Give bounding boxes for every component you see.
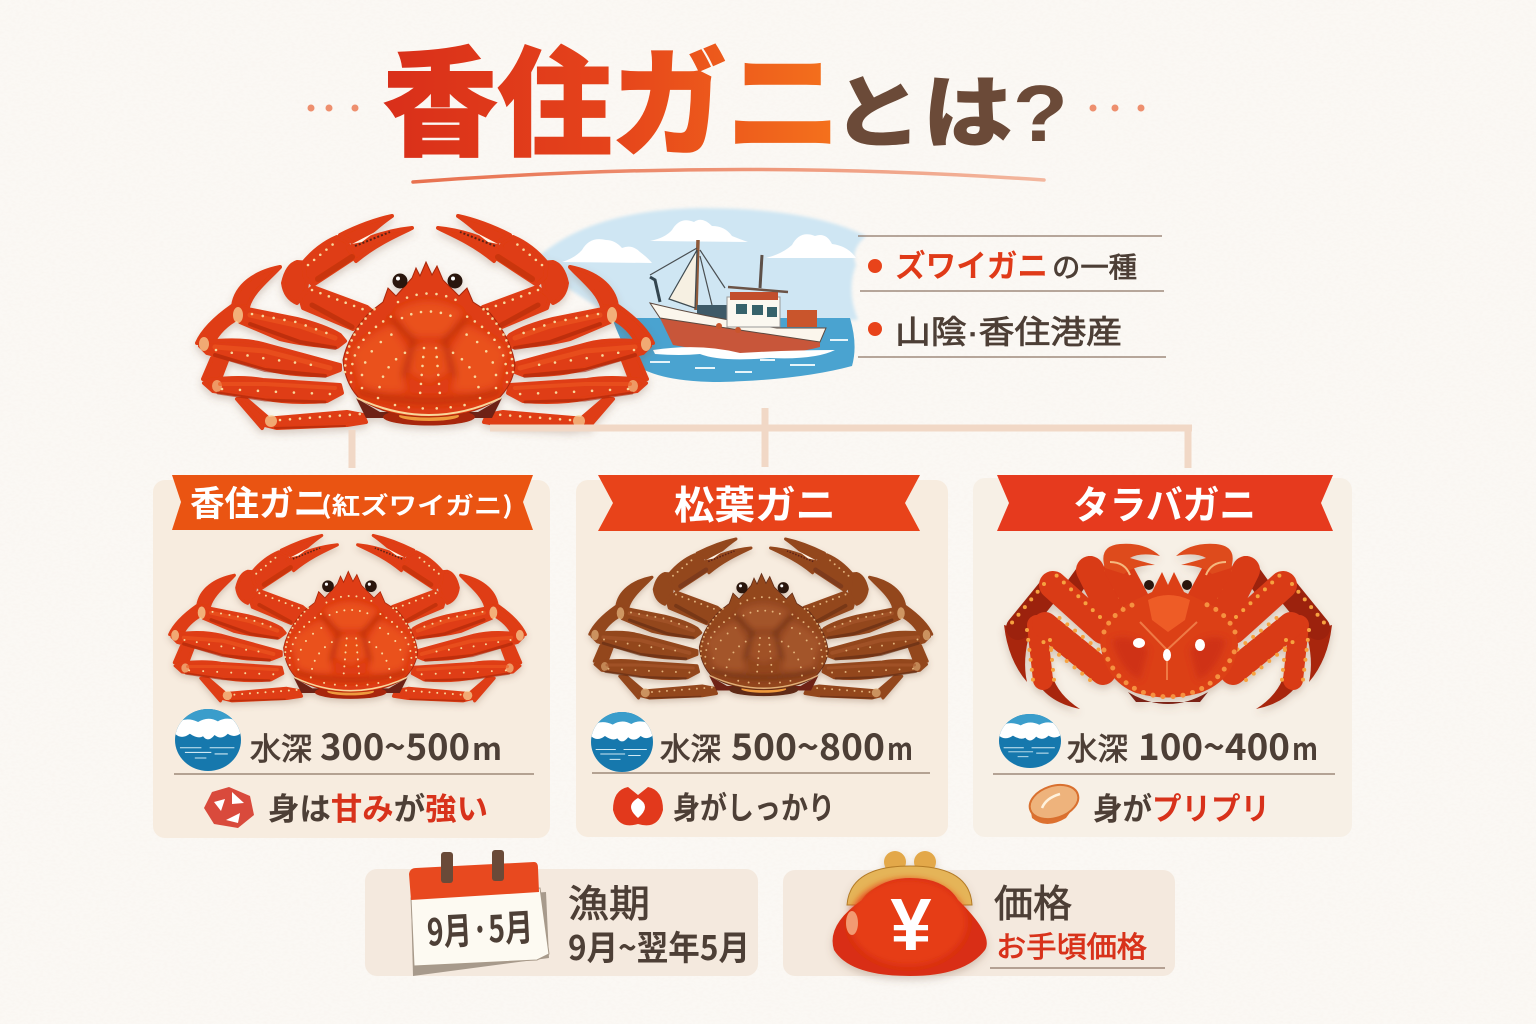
banner: (紅ズワイガニ) bbox=[321, 486, 513, 521]
title: main heading: 香住ガニ bbox=[383, 40, 841, 172]
king crab bbox=[1004, 544, 1332, 709]
sea bbox=[612, 318, 855, 382]
banner bbox=[598, 475, 920, 531]
foam bbox=[653, 347, 835, 359]
panel background bbox=[365, 869, 758, 976]
fact: origin: 山陰·香住港産 bbox=[895, 314, 1122, 350]
icon: coin purse bbox=[833, 851, 987, 976]
banner: タラバガニ bbox=[1073, 485, 1256, 528]
boat bbox=[650, 240, 826, 355]
panel: タラバガニ bbox=[973, 475, 1352, 837]
icon: coin purse: ¥ bbox=[890, 883, 932, 966]
card background bbox=[973, 478, 1352, 837]
meat trait: 身がプリプリ bbox=[1093, 792, 1270, 827]
crab bbox=[170, 535, 525, 701]
banner: 松葉ガニ bbox=[674, 485, 836, 528]
fact: species bbox=[868, 249, 1137, 284]
icon: calendar: 9月·5月 bbox=[426, 897, 534, 957]
meat trait bbox=[613, 787, 835, 826]
panel background bbox=[783, 870, 1175, 976]
fact rules bbox=[858, 236, 1166, 357]
meat trait bbox=[204, 787, 488, 828]
sky bbox=[537, 208, 866, 322]
connector lines bbox=[352, 408, 1192, 468]
main crab bbox=[197, 216, 653, 428]
banner bbox=[172, 475, 533, 530]
water depth: 300~500 bbox=[320, 719, 470, 771]
panel: 松葉ガニ bbox=[576, 475, 948, 837]
water depth bbox=[999, 714, 1318, 771]
panel: price bbox=[783, 851, 1175, 976]
banner bbox=[997, 475, 1333, 531]
water depth: 水深 bbox=[250, 732, 312, 767]
title: suffix: とは? bbox=[832, 69, 1068, 158]
title bbox=[308, 40, 1144, 182]
water depth: m bbox=[472, 725, 502, 769]
water depth bbox=[591, 712, 913, 772]
water depth: 100~400 bbox=[1138, 719, 1290, 771]
card background bbox=[153, 480, 550, 838]
water depth bbox=[175, 709, 502, 771]
water depth: 水深 bbox=[1067, 732, 1128, 767]
text: price value: お手頃価格 bbox=[996, 931, 1147, 964]
sea ripples bbox=[650, 340, 848, 372]
text: price: 価格 bbox=[994, 884, 1072, 926]
banner: 香住ガニ bbox=[190, 485, 328, 524]
title: right dots bbox=[1090, 104, 1144, 112]
meat trait bbox=[1025, 779, 1270, 827]
meat trait: 身は甘みが強い bbox=[268, 792, 488, 827]
fact: species: の一種 bbox=[1052, 252, 1137, 283]
title: underline bbox=[413, 169, 1044, 182]
water depth: 500~800 bbox=[731, 719, 885, 771]
panel: 香住ガニ bbox=[153, 475, 550, 838]
text: season: 漁期 bbox=[568, 884, 650, 926]
water depth: m bbox=[1292, 725, 1318, 769]
crab bbox=[590, 539, 932, 698]
panel: fishing season bbox=[365, 850, 758, 976]
icon: calendar bbox=[409, 850, 549, 976]
meat trait: 身がしっかり bbox=[673, 791, 835, 826]
text: season value: 9月~翌年5月 bbox=[568, 921, 750, 970]
clouds bbox=[562, 220, 856, 263]
card background bbox=[576, 480, 948, 837]
water depth: m bbox=[887, 725, 913, 769]
illustration: fishing boat at sea bbox=[537, 208, 866, 382]
water depth: 水深 bbox=[660, 732, 721, 767]
title: left dots bbox=[308, 104, 358, 112]
fact: species: ズワイガニ bbox=[895, 249, 1048, 284]
fact list bbox=[858, 236, 1166, 357]
